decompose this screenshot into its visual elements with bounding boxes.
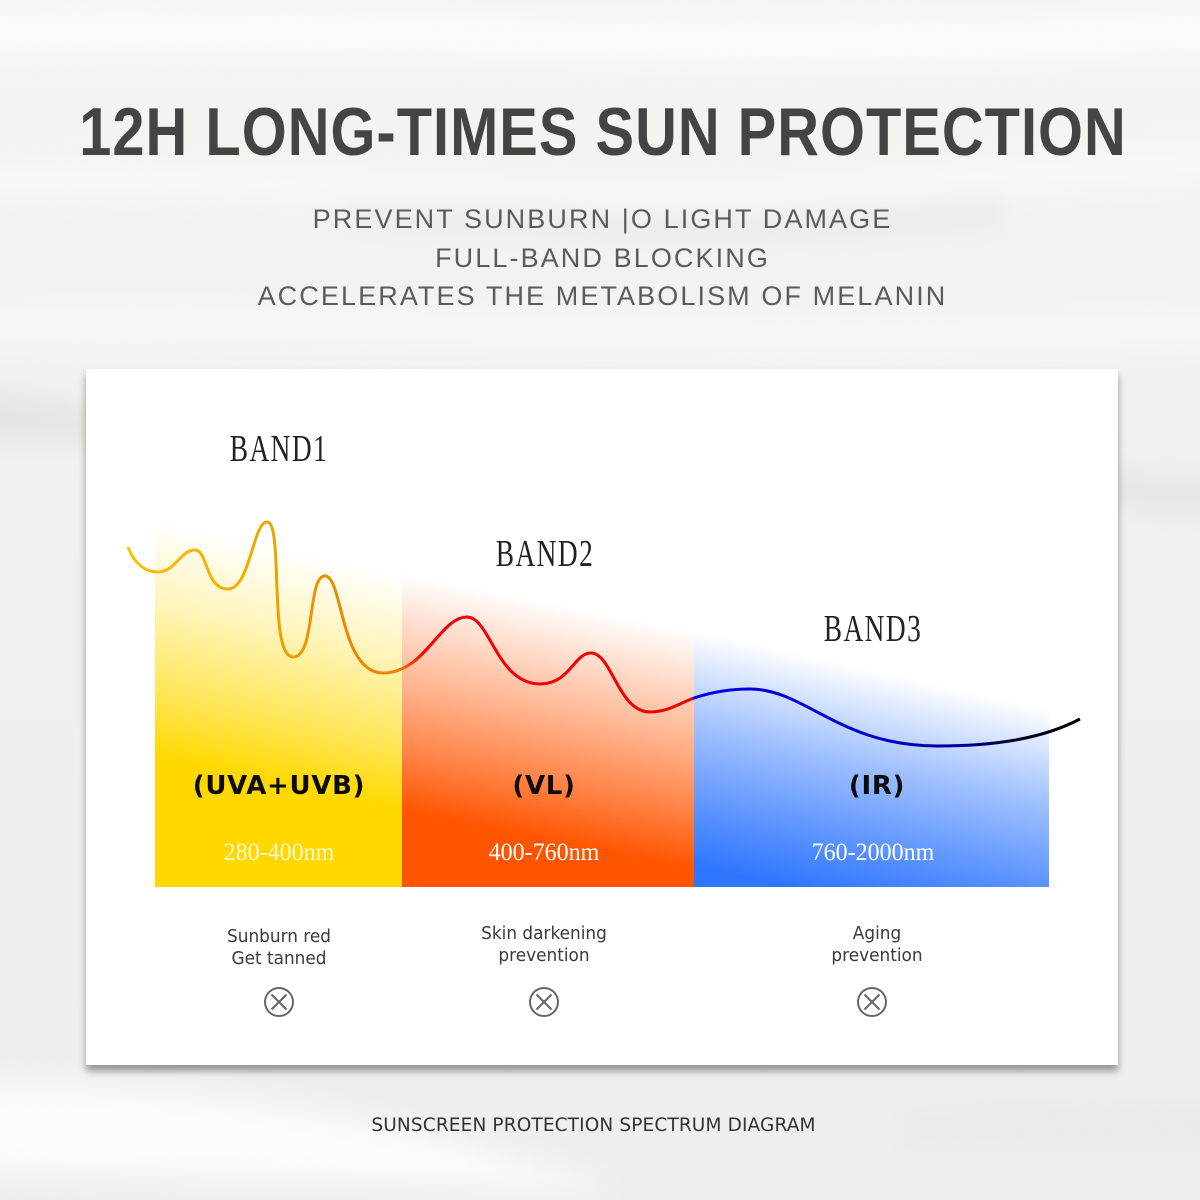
- caption: SUNSCREEN PROTECTION SPECTRUM DIAGRAM: [371, 1115, 816, 1136]
- label: IR: (IR): [849, 771, 905, 801]
- wavelength: 400-760nm: 400-760nm: [489, 839, 599, 866]
- effect text: sunburn: Sunburn red: [227, 927, 331, 947]
- label: VL: (VL): [512, 771, 576, 801]
- band 1 colour block: [155, 510, 402, 887]
- effect text: sunburn: Get tanned: [232, 949, 326, 969]
- label: BAND3: BAND3: [824, 608, 922, 650]
- label: BAND1: BAND1: [230, 428, 328, 470]
- effect text: skin darkening: Skin darkening: [481, 924, 607, 944]
- effect text: aging: Aging: [853, 924, 901, 944]
- label: BAND2: BAND2: [496, 533, 594, 575]
- effect text: aging: prevention: [831, 946, 923, 966]
- label: UVA+UVB: (UVA+UVB): [193, 771, 365, 801]
- effect text: skin darkening: prevention: [498, 946, 590, 966]
- effect text: aging: [831, 924, 923, 966]
- effect text: skin darkening: [481, 924, 607, 966]
- subtitle text block: FULL-BAND BLOCKING: [435, 242, 770, 272]
- icon: cross circle 1: [264, 987, 294, 1017]
- panel: spectrum diagram: [86, 369, 1118, 1065]
- spectrum wave line: [128, 522, 1080, 746]
- icon: cross circle 3: [857, 987, 887, 1017]
- title: 12H LONG-TIMES SUN PROTECTION: [79, 94, 1126, 170]
- band 2 colour block: [402, 560, 694, 887]
- icon: cross circle 2: [529, 987, 559, 1017]
- wavelength: 280-400nm: 280-400nm: [224, 839, 334, 866]
- subtitle text block: [258, 204, 947, 311]
- band 3 colour block: [694, 620, 1049, 887]
- wavelength: 760-2000nm: 760-2000nm: [811, 839, 934, 866]
- effect text: sunburn: [227, 927, 331, 969]
- subtitle text block: ACCELERATES THE METABOLISM OF MELANIN: [258, 281, 947, 311]
- subtitle text block: PREVENT SUNBURN |O LIGHT DAMAGE: [313, 204, 892, 234]
